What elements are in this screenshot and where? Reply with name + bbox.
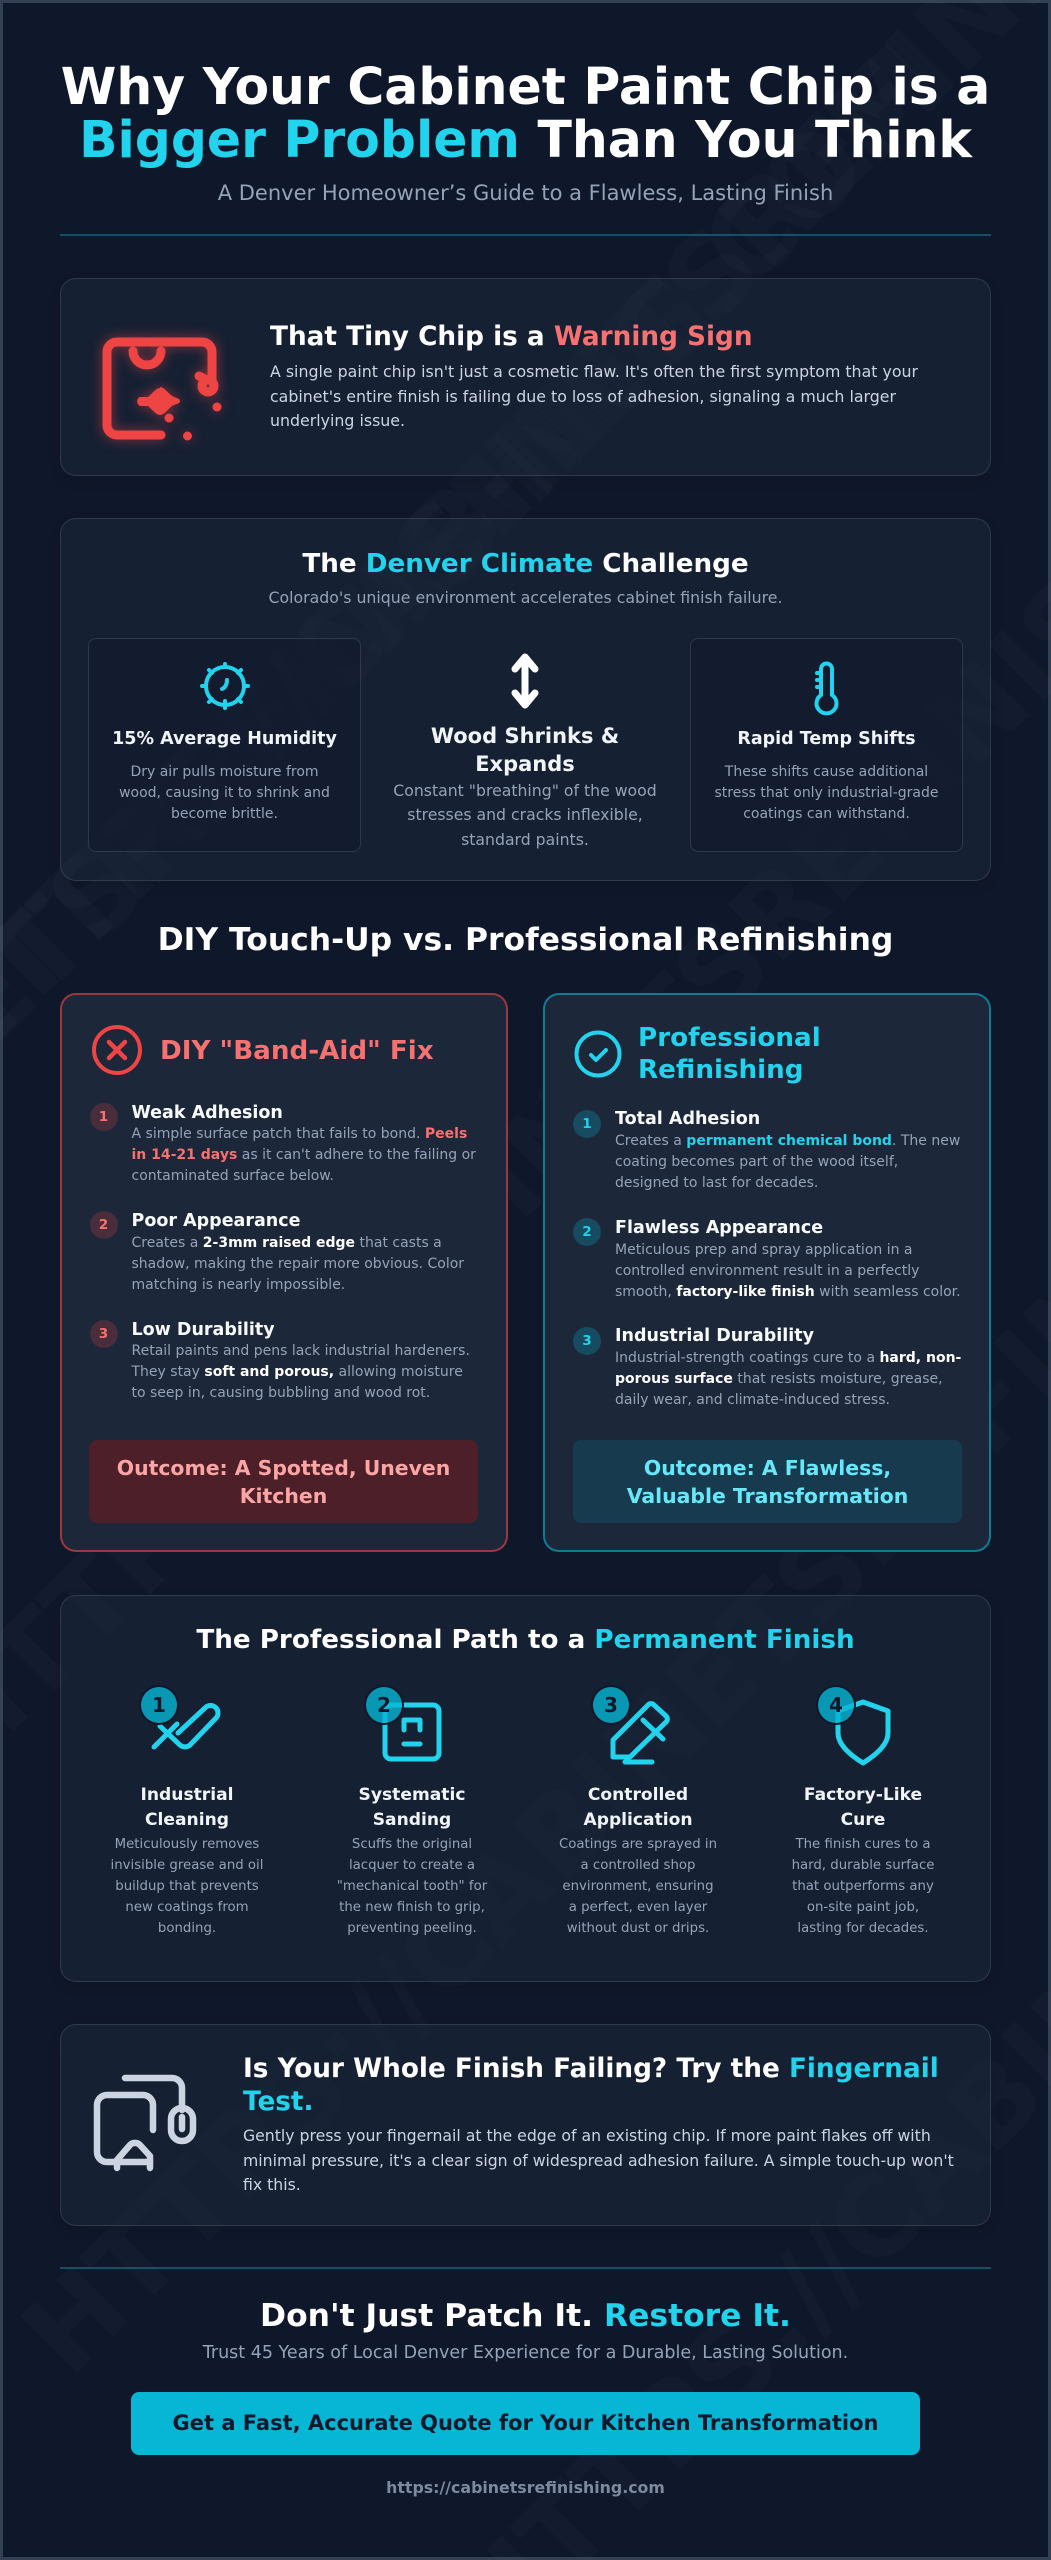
icon: thermometer	[814, 662, 838, 716]
step title 1: Cleaning	[145, 1810, 229, 1830]
item text	[131, 1343, 470, 1401]
card text: temp shifts	[714, 764, 939, 822]
number 3: 3	[99, 1326, 108, 1342]
text: fingernail test: fix this.	[243, 2175, 301, 2194]
heading: Denver climate: The Denver Climate Challenge	[302, 549, 749, 579]
step number 2: 2	[377, 1693, 391, 1717]
card text: humidity: wood, causing it to shrink and	[119, 785, 330, 801]
icon: cleaning	[152, 1703, 220, 1750]
text: warning sign: underlying issue.	[270, 411, 405, 430]
subtitle: A Denver Homeowner’s Guide to a Flawless, Lasting Finish	[218, 181, 833, 205]
icon: fingernail test	[94, 2074, 196, 2172]
outcome: professional	[573, 1440, 962, 1523]
text: fingernail test: Gently press your fingernail at the edge of an existing chip. If more paint flakes off with	[243, 2126, 931, 2145]
panel: Denver climate	[60, 518, 991, 881]
panel: professional	[543, 993, 991, 1552]
item text: matching is nearly impossible.	[132, 1277, 345, 1293]
step title 2: Sanding	[373, 1810, 451, 1830]
icon: up-down arrow	[512, 654, 538, 708]
number 1: 1	[99, 1109, 108, 1125]
step text 4	[792, 1837, 934, 1936]
number 1: 1	[582, 1116, 592, 1132]
step text 2: the new finish to grip,	[339, 1900, 485, 1915]
heading: professional: Professional	[638, 1023, 821, 1053]
item text: A simple surface patch that fails to bond. Peels	[132, 1126, 467, 1142]
item text	[615, 1242, 961, 1300]
step text 1: Meticulously removes	[115, 1837, 259, 1852]
number 3	[90, 1320, 118, 1348]
card text: wood: standard paints.	[461, 830, 589, 849]
step title 3: Application	[583, 1810, 693, 1830]
card text: wood: stresses and cracks inflexible,	[407, 805, 643, 824]
step title 1: Industrial	[141, 1785, 233, 1805]
icon: shield	[836, 1700, 890, 1766]
icon: sanding	[382, 1702, 442, 1762]
step number 2	[366, 1687, 402, 1723]
card text: temp shifts: stress that only industrial-grade	[714, 785, 939, 801]
step number 3: 3	[604, 1693, 618, 1717]
title	[61, 57, 990, 169]
divider	[60, 2267, 991, 2269]
panel: fingernail test	[60, 2024, 991, 2226]
step number 1	[141, 1687, 177, 1723]
button: quote: Get a Fast, Accurate Quote for Your Kitchen Transformation	[172, 2411, 878, 2435]
outcome: DIY: Kitchen	[240, 1484, 327, 1508]
heading: fingernail test: Is Your Whole Finish Failing? Try the Fingernail	[243, 2054, 939, 2084]
card text: wood	[393, 781, 657, 849]
step title 3: Controlled	[588, 1785, 688, 1805]
item title: Flawless Appearance	[615, 1218, 823, 1238]
number 3	[573, 1327, 601, 1355]
step text 3	[559, 1837, 717, 1936]
item text: Retail paints and pens lack industrial hardeners.	[132, 1343, 470, 1359]
item text: coating becomes part of the wood itself,	[615, 1154, 898, 1170]
step number 4: 4	[829, 1693, 843, 1717]
step title 4: Cure	[841, 1810, 885, 1830]
step text 3: without dust or drips.	[567, 1921, 709, 1936]
step text 2	[337, 1837, 488, 1936]
item title: Low Durability	[132, 1320, 275, 1340]
heading: warning sign: That Tiny Chip is a Warning Sign	[270, 322, 753, 352]
panel: warning sign	[60, 278, 991, 476]
text: warning sign	[270, 362, 918, 430]
step title 2: Systematic	[359, 1785, 465, 1805]
step text 1: buildup that prevents	[115, 1879, 259, 1894]
step title 2	[359, 1785, 465, 1830]
card: temp shifts	[690, 638, 963, 852]
item title: Total Adhesion	[615, 1109, 760, 1129]
card text: humidity: become brittle.	[171, 806, 278, 822]
step text 3: environment, ensuring	[562, 1879, 714, 1894]
item text: They stay soft and porous, allowing moisture	[132, 1364, 463, 1380]
step text 1: new coatings from	[125, 1900, 249, 1915]
outcome: DIY	[89, 1440, 478, 1523]
item title: Weak Adhesion	[132, 1103, 283, 1123]
icon: spray pencil	[610, 1701, 670, 1764]
icon: check circle	[574, 1030, 622, 1078]
card text: humidity	[119, 764, 330, 822]
text: fingernail test	[243, 2126, 954, 2194]
item text: smooth, factory-like finish with seamless color.	[615, 1284, 961, 1300]
step text 4: lasting for decades.	[797, 1921, 929, 1936]
item text: controlled environment result in a perfectly	[615, 1263, 919, 1279]
item title: Industrial Durability	[615, 1326, 814, 1346]
text: CTA subtitle: Trust 45 Years of Local Denver Experience for a Durable, Lasting Solution.	[203, 2343, 848, 2363]
step number 3	[593, 1687, 629, 1723]
step text 3: a perfect, even layer	[569, 1900, 707, 1915]
item text	[615, 1133, 960, 1191]
step number 1: 1	[152, 1693, 166, 1717]
number 1	[573, 1110, 601, 1138]
item text: Meticulous prep and spray application in a	[615, 1242, 913, 1258]
step title 3	[583, 1785, 693, 1830]
item text: designed to last for decades.	[615, 1175, 818, 1191]
number 3: 3	[582, 1333, 592, 1349]
card title: humidity: 15% Average Humidity	[112, 729, 337, 749]
item text	[132, 1126, 476, 1184]
button: quote	[131, 2392, 920, 2455]
step text 2: "mechanical tooth" for	[337, 1879, 487, 1894]
icon: chipped cabinet	[94, 329, 227, 448]
item text: to seep in, causing bubbling and wood rot.	[132, 1385, 430, 1401]
outcome: professional: Valuable Transformation	[627, 1484, 908, 1508]
item text	[132, 1235, 464, 1293]
heading: fingernail test: Test.	[243, 2087, 314, 2117]
outcome: DIY: Outcome: A Spotted, Uneven	[117, 1456, 450, 1480]
item text: contaminated surface below.	[132, 1168, 334, 1184]
card title: temp shifts: Rapid Temp Shifts	[737, 729, 916, 749]
item text	[615, 1350, 961, 1408]
item text: in 14-21 days as it can't adhere to the failing or	[132, 1147, 476, 1163]
card text: humidity: Dry air pulls moisture from	[130, 764, 319, 780]
heading: fingernail test	[243, 2054, 939, 2117]
step text 1: invisible grease and oil	[111, 1858, 263, 1873]
step text 4: on-site paint job,	[807, 1900, 919, 1915]
step text 3: a controlled shop	[581, 1858, 695, 1873]
text: fingernail test: minimal pressure, it's a clear sign of widespread adhesion failure. A simple touch-up won't	[243, 2150, 954, 2170]
item title: Poor Appearance	[132, 1211, 301, 1231]
heading: professional	[638, 1023, 821, 1085]
step number 4	[818, 1687, 854, 1723]
item text: Industrial-strength coatings cure to a hard, non-	[615, 1350, 961, 1366]
step title 4: Factory-Like	[804, 1785, 922, 1805]
text: warning sign: A single paint chip isn't just a cosmetic flaw. It's often the first symptom that your	[270, 362, 918, 381]
title: Bigger Problem Than You Think	[79, 110, 972, 169]
step text 4: hard, durable surface	[792, 1858, 934, 1873]
item text: Creates a permanent chemical bond. The new	[615, 1133, 960, 1149]
heading: comparison: DIY Touch-Up vs. Professional Refinishing	[158, 922, 893, 958]
link: website: https://cabinetsrefinishing.com	[386, 2478, 665, 2497]
text: warning sign: cabinet's entire finish is failing due to loss of adhesion, signaling a much larger	[270, 387, 896, 406]
card text: temp shifts: coatings can withstand.	[743, 806, 910, 822]
text: climate subtitle: Colorado's unique environment accelerates cabinet finish failure.	[268, 588, 782, 607]
number 2: 2	[99, 1217, 108, 1233]
panel: DIY	[60, 993, 508, 1552]
card: humidity	[88, 638, 361, 852]
heading: professional path: The Professional Path to a Permanent Finish	[196, 1625, 855, 1655]
panel: professional path	[60, 1595, 991, 1982]
step text 2: lacquer to create a	[349, 1858, 475, 1873]
title: Why Your Cabinet Paint Chip is a	[61, 57, 990, 116]
outcome: professional: Outcome: A Flawless,	[644, 1456, 891, 1480]
step title 1	[141, 1785, 233, 1830]
step text 4: that outperforms any	[792, 1879, 934, 1894]
card text: wood: Constant "breathing" of the wood	[393, 781, 657, 800]
heading: professional: Refinishing	[638, 1055, 804, 1085]
heading: DIY: DIY "Band-Aid" Fix	[160, 1036, 434, 1066]
item text: porous surface that resists moisture, grease,	[615, 1371, 943, 1387]
heading: CTA: Don't Just Patch It. Restore It.	[260, 2298, 791, 2334]
card title: wood: Wood Shrinks &	[431, 724, 619, 748]
number 1	[90, 1103, 118, 1131]
step text 1: bonding.	[158, 1921, 216, 1936]
step text 4: The finish cures to a	[795, 1837, 930, 1852]
step text 2: Scuffs the original	[352, 1837, 472, 1852]
divider	[60, 234, 991, 236]
item text: shadow, making the repair more obvious. Color	[132, 1256, 464, 1272]
icon: X circle	[92, 1025, 142, 1075]
icon: gauge	[200, 662, 250, 710]
card title: wood: Expands	[475, 752, 575, 776]
number 2: 2	[582, 1224, 592, 1240]
step text 2: preventing peeling.	[347, 1921, 477, 1936]
item text: Creates a 2-3mm raised edge that casts a	[132, 1235, 442, 1251]
step title 4	[804, 1785, 922, 1830]
number 2	[573, 1218, 601, 1246]
item text: daily wear, and climate-induced stress.	[615, 1392, 890, 1408]
step text 3: Coatings are sprayed in	[559, 1837, 717, 1852]
number 2	[90, 1211, 118, 1239]
card title: wood	[431, 724, 619, 776]
card text: temp shifts: These shifts cause additional	[725, 764, 928, 780]
step text 1	[111, 1837, 263, 1936]
